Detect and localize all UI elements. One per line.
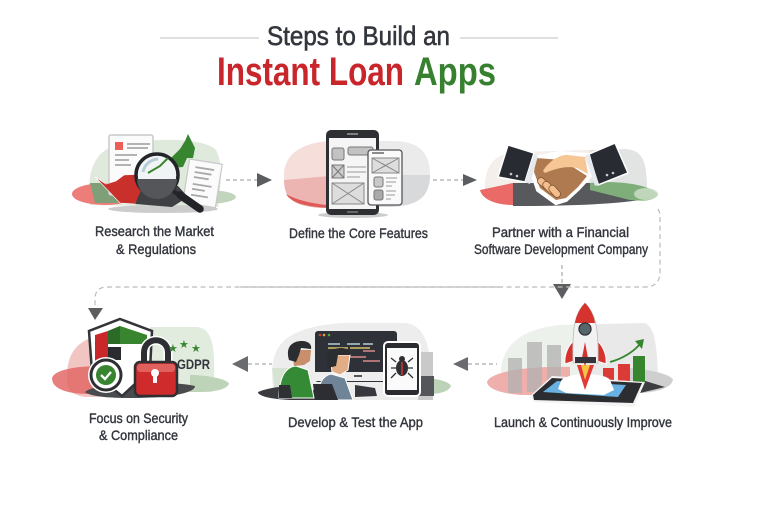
step 4: security [52, 319, 229, 398]
icon: monitor code [315, 331, 397, 382]
step 6: launch [487, 303, 673, 407]
label: partner: Partner with a Financial [492, 224, 629, 240]
icon: developer left [279, 341, 314, 398]
arrow 1 [226, 173, 272, 187]
label: partner: Software Development Company [474, 241, 648, 257]
icon: check badge [88, 357, 124, 393]
text: GDPR: GDPR [177, 356, 210, 372]
arrow: launch to develop [453, 357, 497, 371]
arrow: long connector [88, 209, 660, 320]
icon: stars: ★ [191, 343, 201, 355]
label: define: Define the Core Features [289, 225, 428, 241]
icon: map [95, 134, 195, 207]
icon: stars: ★ [168, 343, 178, 355]
icon: left sleeve [498, 145, 538, 184]
icon: phone [530, 374, 645, 407]
icon: padlock [135, 340, 177, 396]
icon: document [109, 135, 153, 195]
title: Instant Loan [217, 50, 404, 94]
icon: shield [89, 319, 152, 396]
label: research [95, 223, 214, 257]
icon: small phone wireframe [368, 150, 402, 205]
step 2: define core features [284, 130, 430, 218]
icon: phone wireframe [326, 130, 379, 215]
icon: handshake [532, 153, 590, 203]
arrow 2 [433, 174, 477, 186]
icon: phone bug [384, 342, 420, 396]
label: research: Research the Market [95, 223, 214, 239]
arrow: develop to security [232, 356, 272, 372]
label: security: & Compliance [99, 427, 178, 443]
label: develop: Develop & Test the App [288, 414, 423, 430]
icon: rocket [565, 303, 606, 390]
label: security: Focus on Security [89, 410, 188, 426]
label: launch: Launch & Continuously Improve [494, 414, 672, 430]
label: security [89, 410, 188, 443]
title: Apps [414, 50, 496, 94]
icon: buildings [508, 342, 561, 393]
icon: stars [168, 339, 201, 355]
label: research: & Regulations [116, 241, 196, 257]
step 3: partner [480, 143, 658, 206]
title [160, 21, 558, 94]
icon: magnifier [136, 154, 200, 209]
arrow: down to launch [553, 265, 571, 299]
title: Steps to Build an [267, 21, 450, 51]
icon: developer right [313, 348, 377, 400]
icon: document right [183, 159, 222, 208]
step 1: research the market [72, 134, 236, 213]
icon: bar chart with arrow [603, 339, 645, 382]
step 5: develop [258, 323, 451, 400]
icon: stars: ★ [179, 339, 189, 351]
label: partner [474, 224, 648, 257]
icon: right sleeve [585, 143, 628, 186]
